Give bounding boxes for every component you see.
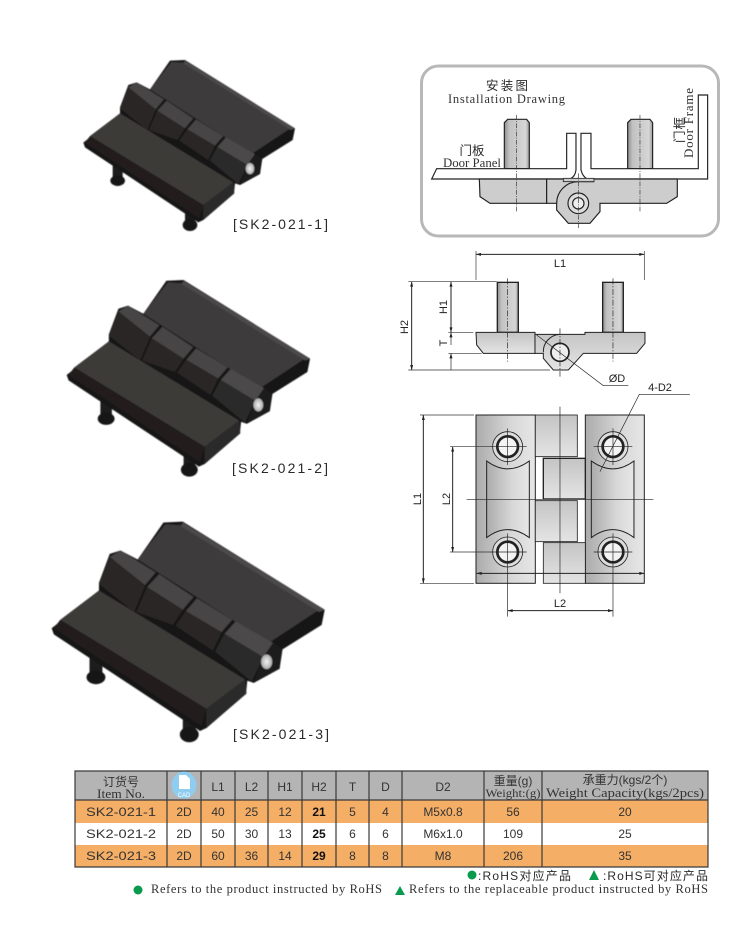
label: door frame: 门框 <box>672 117 687 143</box>
dimension labels: side view: ØD <box>609 373 625 385</box>
dimension labels: front view: L2 <box>554 598 566 610</box>
legend: RoHS notes: :RoHS可对应产品 <box>603 868 708 883</box>
row: SK2-021-2: 2D <box>176 827 192 841</box>
table header background <box>75 771 708 800</box>
legend: RoHS notes: :RoHS对应产品 <box>478 868 571 883</box>
table grid <box>75 771 708 867</box>
label: SK2-021-3: [SK2-021-3] <box>233 726 329 742</box>
header text: Item No. <box>97 787 145 801</box>
side view dimension drawing <box>399 251 672 394</box>
table rows <box>75 800 708 867</box>
dimension labels: side view: H1 <box>438 300 450 314</box>
row: SK2-021-2: 6 <box>382 827 389 841</box>
row: SK2-021-2: M6x1.0 <box>423 827 463 841</box>
header text: T <box>349 780 357 794</box>
dimension labels: front view <box>412 493 566 610</box>
dimension labels: side view: L1 <box>554 258 566 270</box>
product photo: SK2-021-3 hinge <box>52 522 325 742</box>
dimension labels: side view: T <box>438 339 450 346</box>
front view dimension drawing <box>412 394 690 617</box>
legend: RoHS notes: Refers to the product instructed by RoHS <box>151 882 382 896</box>
row: SK2-021-1: 2D <box>176 805 192 819</box>
row: SK2-021-3: 206 <box>503 849 523 863</box>
row: SK2-021-1: 40 <box>211 805 225 819</box>
header text: 订货号 <box>103 774 139 789</box>
row: SK2-021-1: SK2-021-1 <box>86 805 156 819</box>
header text: Weight Capacity(kgs/2pcs) <box>546 786 704 800</box>
panel: installation drawing <box>422 66 718 236</box>
header text: D <box>381 780 390 794</box>
row: SK2-021-3: 8 <box>349 849 356 863</box>
header text: H1 <box>277 780 293 794</box>
header text: 重量(g) <box>494 774 532 788</box>
row: SK2-021-3: 8 <box>382 849 389 863</box>
row: SK2-021-1: 5 <box>349 805 356 819</box>
row: SK2-021-1: 12 <box>278 805 292 819</box>
header text <box>97 773 704 801</box>
product photo: SK2-021-1 hinge <box>83 60 295 231</box>
row: SK2-021-3: 2D <box>176 849 192 863</box>
header text: 承重力(kgs/2个) <box>583 773 667 787</box>
heading: installation drawing: Installation Drawing <box>448 92 566 106</box>
header text: Weight:(g) <box>486 786 541 800</box>
row: SK2-021-1: 25 <box>245 805 258 819</box>
dimension labels: front view: L1 <box>412 493 424 505</box>
installation diagram <box>432 95 708 228</box>
header text: L1 <box>211 780 225 794</box>
row: SK2-021-1: 21 <box>312 805 326 819</box>
legend: RoHS notes: Refers to the replaceable product instructed by RoHS <box>409 882 708 896</box>
row: SK2-021-3 <box>86 849 632 863</box>
icon: CAD badge <box>172 772 196 799</box>
label: door frame: Door Frame <box>681 88 696 158</box>
row: SK2-021-3: 29 <box>312 849 326 863</box>
product photo: SK2-021-2 hinge <box>67 280 310 477</box>
label: door frame <box>672 88 696 158</box>
row: SK2-021-2: SK2-021-2 <box>86 827 156 841</box>
heading: installation drawing: 安装图 <box>486 78 528 93</box>
legend: RoHS notes <box>134 868 708 896</box>
icon: CAD badge: CAD <box>178 793 191 799</box>
row: SK2-021-3: M8 <box>435 849 452 863</box>
row: SK2-021-1: 4 <box>382 805 389 819</box>
row: SK2-021-2: 13 <box>278 827 292 841</box>
label: SK2-021-2: [SK2-021-2] <box>232 460 328 476</box>
row: SK2-021-2: 6 <box>349 827 356 841</box>
row: SK2-021-2: 50 <box>211 827 225 841</box>
row: SK2-021-2 <box>86 827 632 841</box>
dimension labels: front view: L2 <box>441 493 453 505</box>
dimension labels: side view: H2 <box>399 320 411 334</box>
row: SK2-021-2: 25 <box>618 827 632 841</box>
dimension labels: side view <box>399 258 672 394</box>
header text: H2 <box>311 780 327 794</box>
row: SK2-021-2: 30 <box>245 827 258 841</box>
row: SK2-021-1: 56 <box>506 805 520 819</box>
row: SK2-021-3: 60 <box>211 849 225 863</box>
row: SK2-021-1: 20 <box>618 805 632 819</box>
row: SK2-021-2: 109 <box>503 827 523 841</box>
heading: installation drawing <box>448 78 566 106</box>
label: SK2-021-1: [SK2-021-1] <box>233 216 328 232</box>
row: SK2-021-3: 14 <box>278 849 292 863</box>
label: door panel <box>443 143 502 170</box>
dimension labels: side view: 4-D2 <box>648 382 672 394</box>
header text: D2 <box>435 780 451 794</box>
label: door panel: Door Panel <box>443 156 502 170</box>
specification table <box>75 771 708 867</box>
row: SK2-021-3: 36 <box>245 849 258 863</box>
row: SK2-021-3: SK2-021-3 <box>86 849 156 863</box>
row: SK2-021-1: M5x0.8 <box>423 805 463 819</box>
row: SK2-021-2: 25 <box>312 827 326 841</box>
label: door panel: 门板 <box>459 143 485 158</box>
header text: L2 <box>245 780 258 794</box>
row: SK2-021-3: 35 <box>618 849 632 863</box>
row: SK2-021-1 <box>86 805 632 819</box>
